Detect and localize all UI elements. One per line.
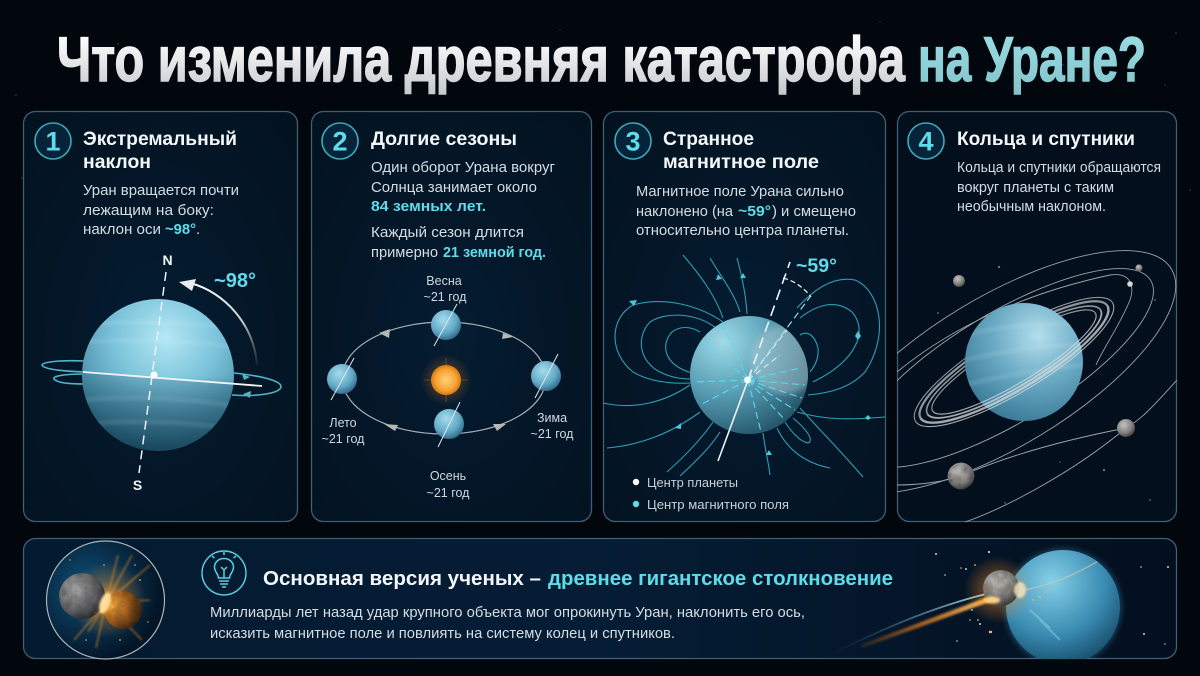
label spring [424, 274, 467, 304]
banner text [210, 604, 805, 642]
label spring: Весна [426, 274, 462, 288]
panel 2: long seasons [312, 112, 592, 522]
panel 1 text [83, 182, 239, 238]
diagram: orbit and seasons [322, 274, 574, 500]
panel 4 text: Кольца и спутники обращаются [957, 159, 1161, 176]
panel 1 heading: наклон [83, 152, 151, 173]
planet [1004, 548, 1122, 666]
panel 4 text [957, 159, 1161, 215]
planet summer [327, 358, 357, 400]
badge 3 [615, 123, 651, 159]
panel 2 text: 21 земной год. [443, 244, 546, 261]
burning rock [104, 591, 142, 629]
rings front half [915, 302, 1114, 428]
label summer: ~21 год [322, 432, 365, 446]
panel 3 heading [663, 129, 819, 173]
planet [82, 299, 234, 451]
panel 3 text: относительно центра планеты. [636, 222, 849, 239]
badge 4: 4 [918, 126, 934, 156]
sun [420, 354, 472, 406]
background stars [15, 21, 1191, 191]
moon top right [1135, 264, 1143, 272]
panel 2 card [312, 112, 592, 522]
sparks [960, 564, 1049, 633]
title: Что изменила древняя катастрофа [57, 25, 906, 95]
label summer [322, 416, 365, 446]
impact flash [97, 591, 113, 615]
legend: Центр планеты [647, 475, 738, 490]
panel 2 text: Каждый сезон длится [371, 224, 524, 241]
panel 2 heading: Долгие сезоны [371, 129, 517, 150]
S label: S [133, 477, 142, 493]
banner card [24, 538, 1176, 658]
planet [965, 303, 1083, 421]
badge 1: 1 [45, 126, 61, 156]
badge 2: 2 [332, 126, 348, 156]
panel 4 heading: Кольца и спутники [957, 129, 1135, 150]
centre point [744, 377, 751, 383]
N label: N [162, 252, 173, 268]
banner text: Миллиарды лет назад удар крупного объекта мог опрокинуть Уран, наклонить его ось, [210, 604, 805, 621]
impact illustration [830, 548, 1169, 666]
moon right [1117, 419, 1135, 437]
label autumn [427, 469, 470, 500]
label winter: Зима [537, 411, 567, 425]
banner heading: Основная версия ученых – [263, 568, 541, 590]
panel 2 text [371, 159, 556, 261]
arrowheads on field lines [629, 273, 871, 455]
rings back half [914, 296, 1113, 422]
tilted axis [718, 262, 790, 461]
impact glow [966, 558, 1030, 622]
moon lower left [948, 462, 974, 490]
moon inner [1127, 281, 1133, 287]
angle value: ~59° [796, 256, 837, 277]
panel 1 card [24, 112, 298, 522]
panel 3 text [636, 183, 856, 239]
legend: Центр магнитного поля [647, 497, 789, 512]
rotation rings back [42, 361, 281, 398]
badge 1 [35, 123, 71, 159]
legend [633, 475, 789, 512]
banner heading [263, 568, 893, 590]
panel 3 text: Магнитное поле Урана сильно [636, 183, 844, 200]
collision illustration [46, 541, 164, 659]
badge 2 [322, 123, 358, 159]
label autumn: ~21 год [427, 486, 470, 500]
field lines [603, 255, 885, 477]
panel 1: extreme tilt [24, 112, 298, 522]
label summer: Лето [329, 416, 357, 430]
badge 4 [908, 123, 944, 159]
label winter: ~21 год [531, 427, 574, 441]
planet winter [531, 354, 561, 398]
banner text: исказить магнитное поле и повлиять на систему колец и спутников. [210, 625, 675, 642]
tilted axis [139, 272, 166, 473]
panel 3 card [604, 112, 886, 522]
panel 2 text: примерно [371, 244, 438, 261]
panel 3 text: наклонено (на [636, 203, 734, 220]
panel 1 text: лежащим на боку: [83, 202, 214, 219]
panel 3 heading: магнитное поле [663, 152, 819, 173]
explosion [69, 555, 150, 648]
panel 1 text: ~98° [165, 221, 196, 238]
tilt angle mark [783, 278, 811, 297]
label winter [531, 411, 574, 441]
planet autumn [434, 402, 464, 447]
impact flash [1014, 582, 1026, 598]
orbits [897, 250, 1177, 522]
icon: light bulb [202, 551, 246, 595]
panel 3 text: ) и смещено [772, 203, 856, 220]
collision frame [46, 541, 164, 659]
magnetic axis [748, 297, 810, 380]
panel 2 text: Солнца занимает около [371, 179, 537, 196]
moon top left [953, 275, 965, 287]
label autumn: Осень [430, 469, 466, 483]
orbit [342, 322, 546, 434]
panel 1 heading: Экстремальный [83, 129, 237, 150]
diagram: Uranus axis tilt [42, 252, 281, 493]
impactor [983, 570, 1019, 606]
stars [935, 551, 1169, 645]
panel 3 text: ~59° [738, 203, 771, 220]
panel 3: magnetic field [603, 112, 886, 522]
panel 3 heading: Странное [663, 129, 754, 150]
banner heading: древнее гигантское столкновение [548, 568, 893, 590]
centre point [150, 371, 158, 379]
panel 4 card [898, 112, 1176, 522]
planet [690, 316, 819, 434]
stars [937, 266, 1156, 504]
diagram: rings and moons [897, 250, 1177, 522]
panel 4 text: необычным наклоном. [957, 198, 1106, 215]
panel 1 text: Уран вращается почти [83, 182, 239, 199]
panel 4: rings and moons [896, 110, 1178, 522]
panel 1 text: наклон оси [83, 221, 161, 238]
diagram: magnetic field [603, 255, 885, 477]
tilt arc arrow [179, 279, 257, 365]
banner: main hypothesis [24, 538, 1176, 666]
panel 4 text: вокруг планеты с таким [957, 179, 1114, 196]
grey rock [59, 573, 105, 619]
panel 1 text: . [196, 221, 200, 238]
panel 2 text: Один оборот Урана вокруг [371, 159, 556, 176]
equator line [83, 372, 262, 386]
panel 1 heading [83, 129, 237, 173]
panel 2 text: 84 земных лет. [371, 198, 486, 215]
comet trail [842, 594, 990, 650]
tilt value: ~98° [214, 270, 256, 292]
planet spring [431, 304, 461, 346]
label spring: ~21 год [424, 290, 467, 304]
badge 3: 3 [625, 126, 641, 156]
